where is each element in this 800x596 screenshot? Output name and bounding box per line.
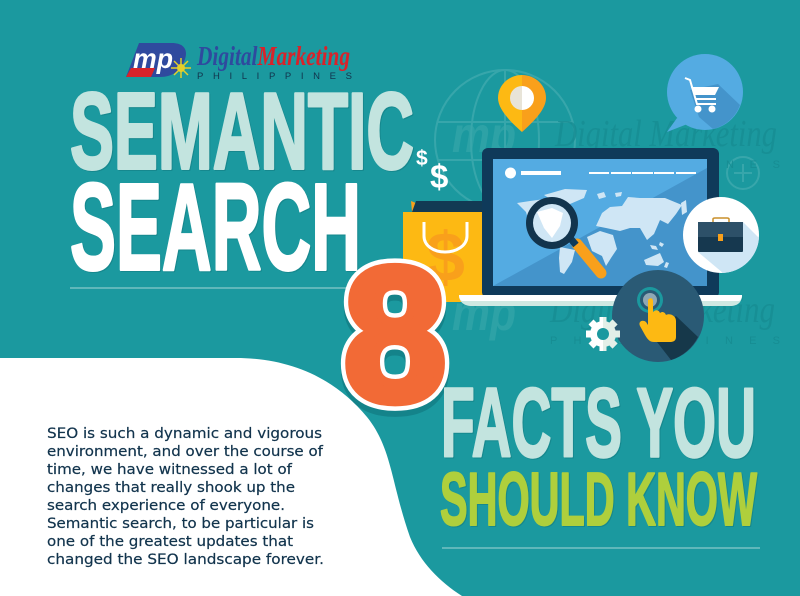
intro paragraph: time, we have witnessed a lot of [47, 462, 293, 478]
screen header [505, 168, 696, 178]
number 8 outline: 8 [344, 228, 446, 441]
icon: hand pointer [612, 270, 704, 362]
dollar signs: $ [416, 147, 428, 170]
intro paragraph: search experience of everyone. [47, 498, 285, 514]
watermark: globe and logo: mp [452, 285, 516, 341]
intro paragraph: Semantic search, to be particular is [47, 516, 314, 532]
laptop base [459, 295, 742, 306]
intro paragraph: changes that really shook up the [47, 480, 295, 496]
intro paragraph: one of the greatest updates that [47, 534, 294, 550]
icon: shopping bag [403, 201, 483, 302]
watermark: globe and logo: PHILIPPINES [550, 335, 780, 347]
icon: shopping bag: $ [426, 218, 465, 296]
icon: gear [586, 317, 620, 351]
dollar signs: $ [430, 158, 448, 195]
icon: location pin [498, 75, 546, 132]
world map [517, 189, 687, 274]
number 8 fill: 8 [344, 228, 446, 441]
intro paragraph: SEO is such a dynamic and vigorous [47, 426, 322, 442]
watermark: globe and logo [435, 70, 780, 347]
intro paragraph: environment, and over the course of [47, 444, 324, 460]
intro paragraph: changed the SEO landscape forever. [47, 552, 324, 568]
divider left [70, 287, 360, 289]
title: semantic: SEMANTIC [70, 70, 414, 192]
logo wordmark: DigitalMarketing [196, 41, 350, 71]
number 8 [344, 228, 446, 447]
icon: laptop with world map [459, 148, 742, 306]
white curved panel [0, 358, 462, 596]
logo [126, 41, 352, 82]
title: search: SEARCH [70, 160, 361, 296]
logo mark: mp [133, 43, 173, 74]
divider right [442, 547, 760, 549]
watermark: globe and logo: PHILIPPINES [555, 159, 780, 171]
logo subtitle: PHILIPPINES [197, 71, 352, 82]
icon: shopping cart bubble [667, 54, 743, 132]
laptop screen [493, 159, 707, 286]
icon: briefcase [683, 197, 759, 273]
watermark: globe and logo: mp [452, 107, 516, 163]
icon: magnifying glass [526, 197, 601, 273]
number 8 shadow: 8 [344, 234, 446, 447]
logo mark [126, 43, 191, 78]
intro paragraph [47, 426, 324, 568]
dollar signs [416, 147, 448, 195]
